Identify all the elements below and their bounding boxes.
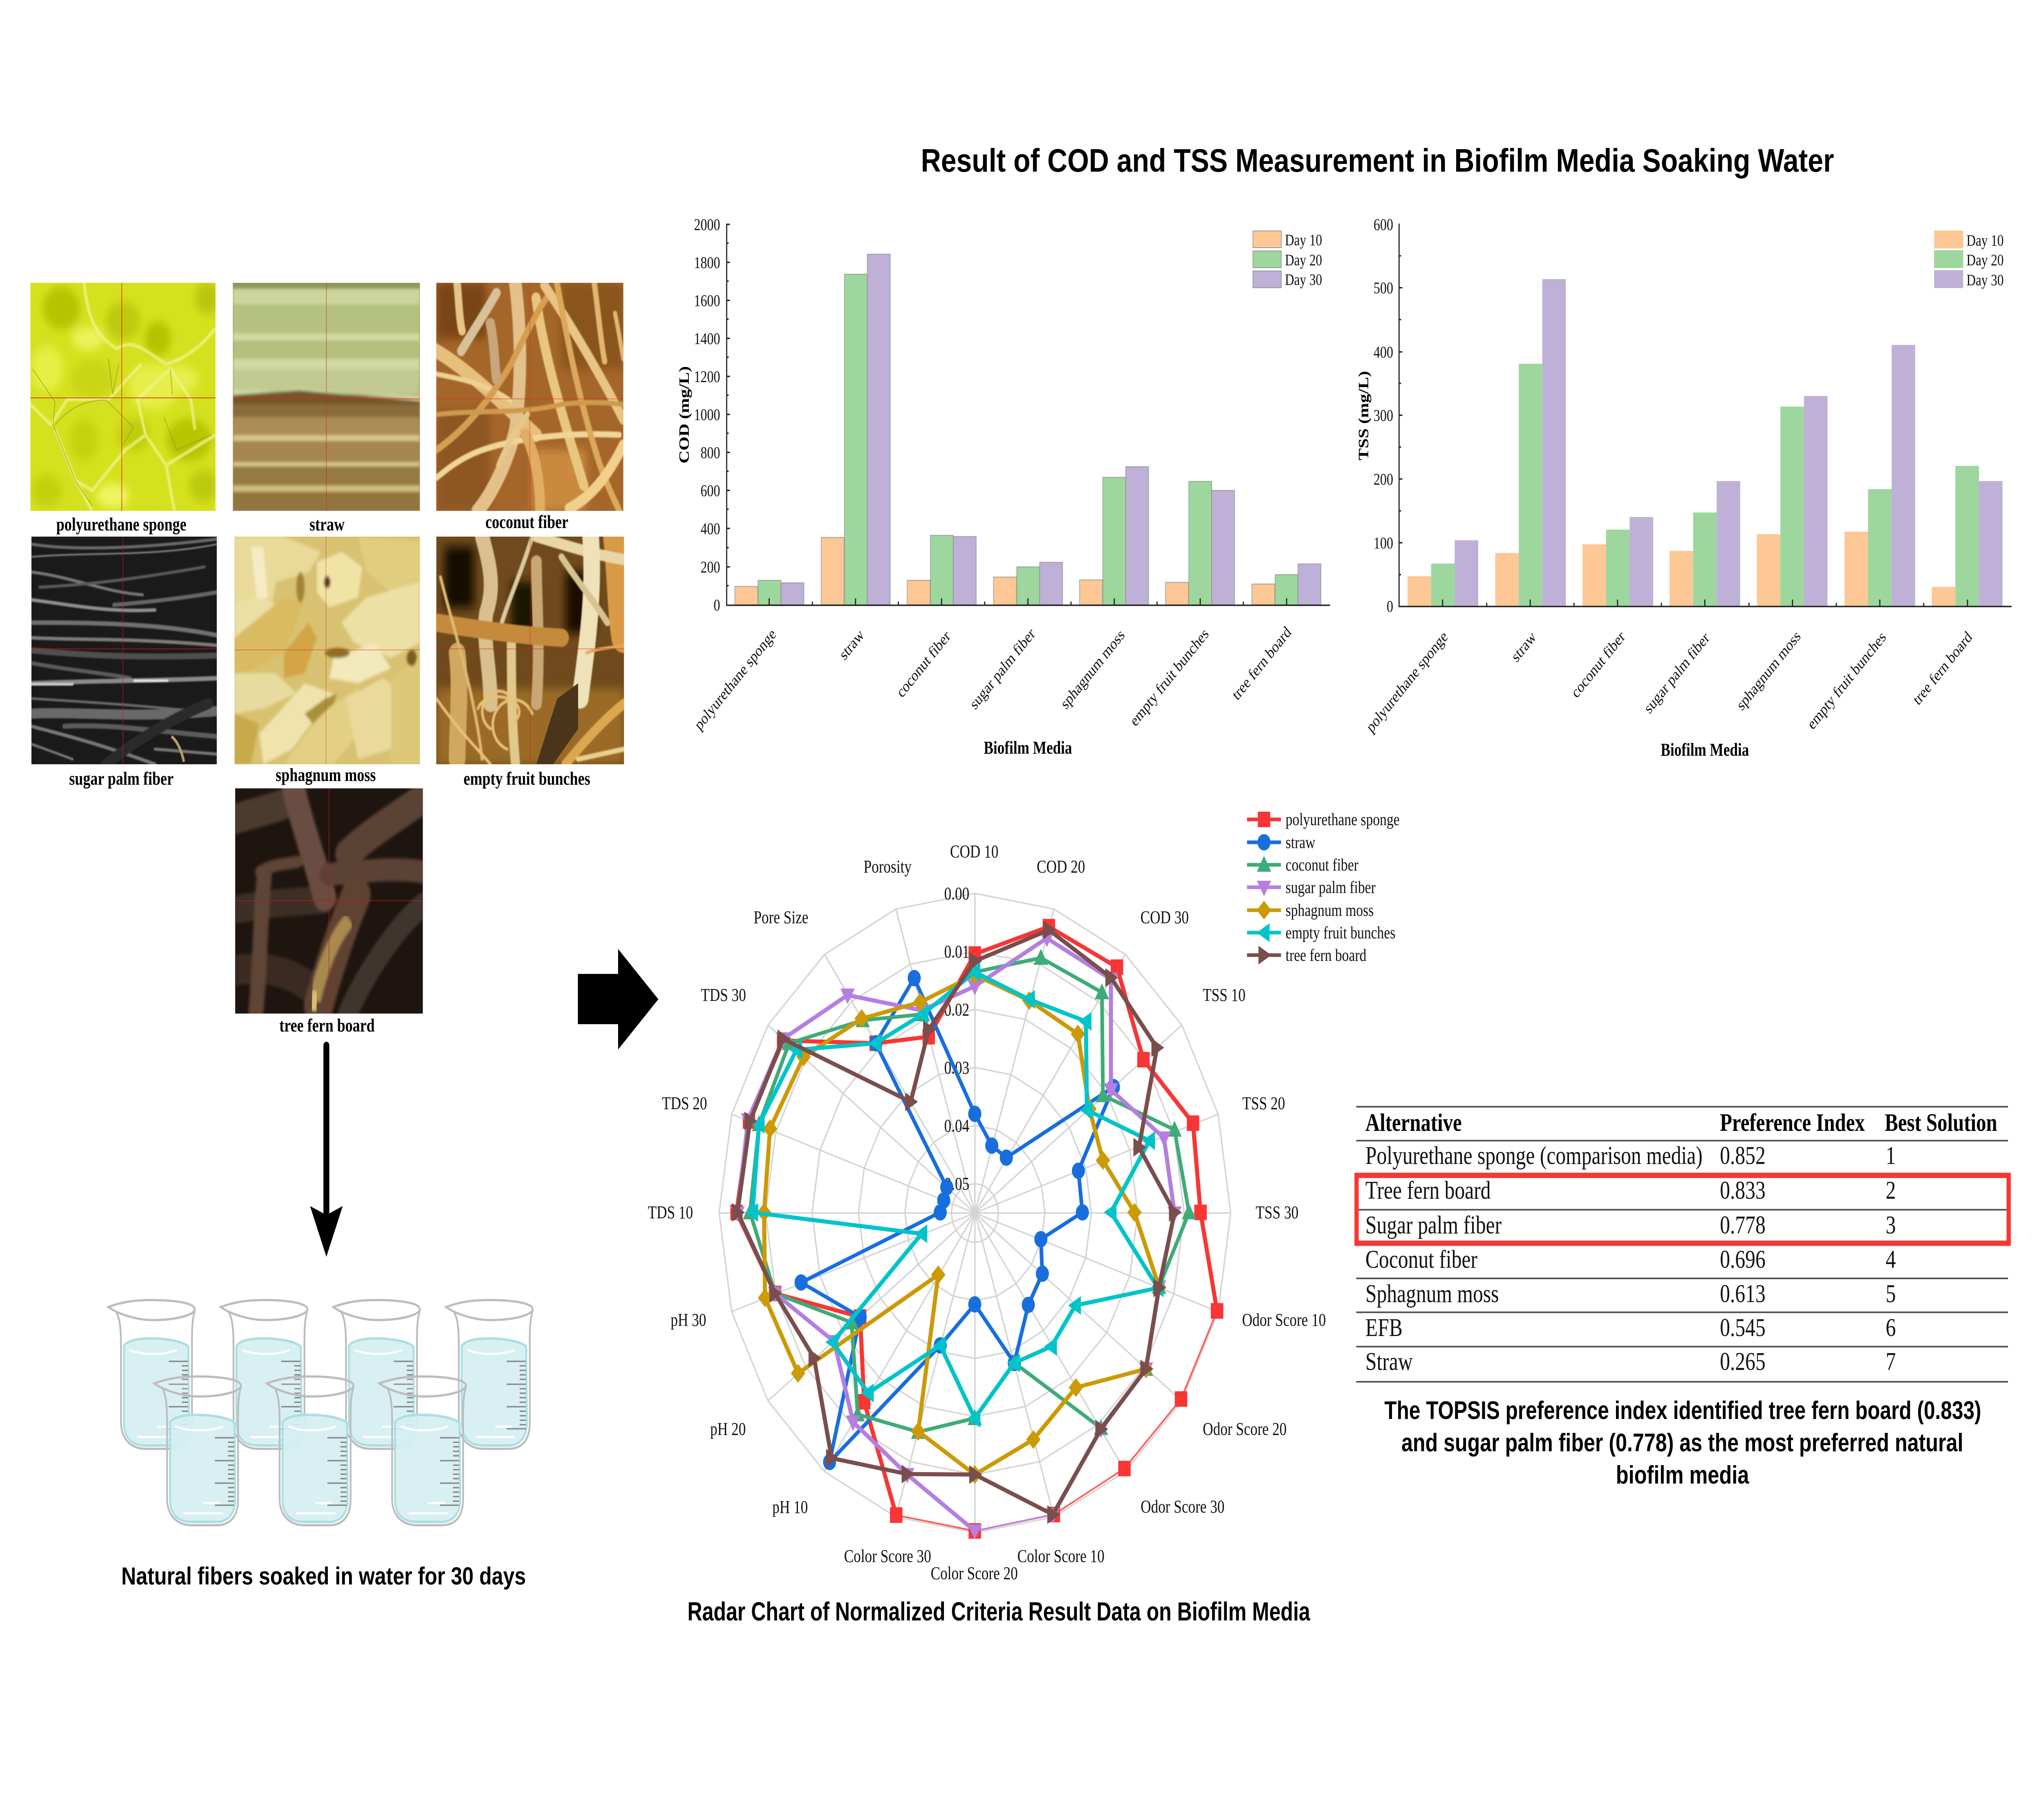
photo captions: straw [309, 514, 345, 535]
series: sphagnum moss [764, 975, 1159, 1475]
COD y tick labels: 1800 [694, 254, 720, 272]
table rows: Sphagnum moss [1365, 1280, 1499, 1308]
COD legend: Day 30 [1285, 271, 1322, 289]
radar legend: polyurethane sponge [1286, 810, 1400, 829]
radar chart [648, 810, 1400, 1583]
table rows: 0.613 [1720, 1280, 1766, 1308]
radar axis labels: TSS 20 [1242, 1093, 1285, 1113]
TSS category labels: sugar palm fiber [1641, 629, 1712, 717]
COD bars [735, 254, 1321, 605]
series: polyurethane sponge [737, 926, 1217, 1531]
table rows: 7 [1886, 1348, 1896, 1376]
arrow: down to beakers [310, 1045, 343, 1257]
table rows: EFB [1365, 1314, 1403, 1342]
photo: sugar palm fiber [31, 537, 217, 764]
table rows: Polyurethane sponge (comparison media) [1365, 1142, 1703, 1170]
TSS y tick labels: 600 [1374, 216, 1393, 234]
caption: TOPSIS result: The TOPSIS preference index identified tree fern board (0.833) [1384, 1396, 1981, 1424]
table rows: Coconut fiber [1365, 1246, 1477, 1273]
title: Result of COD and TSS Measurement in Biofilm Media Soaking Water [921, 142, 1834, 179]
radar legend: straw [1286, 833, 1316, 852]
COD y tick labels: 2000 [694, 216, 720, 234]
TSS category labels [1363, 627, 1975, 736]
bar chart: COD [676, 216, 1330, 758]
table rules [1356, 1107, 2008, 1382]
radar data series [737, 926, 1217, 1531]
COD y tick labels: 1000 [694, 406, 720, 424]
bar chart: TSS [1355, 216, 2012, 760]
TSS y tick labels: 0 [1387, 598, 1393, 615]
TSS axes [1399, 224, 2012, 606]
radar axis labels: pH 30 [671, 1309, 706, 1330]
COD category labels: tree fern board [1229, 623, 1294, 704]
photo: tree fern board [235, 788, 423, 1014]
caption: TOPSIS result: biofilm media [1616, 1461, 1749, 1489]
TSS category labels: sphagnum moss [1734, 627, 1803, 714]
COD y axis title: COD (mg/L) [676, 366, 692, 463]
table rows: 0.833 [1720, 1177, 1766, 1204]
COD category labels: straw [836, 626, 867, 664]
table rows: 0.696 [1720, 1246, 1766, 1273]
TSS y axis title: TSS (mg/L) [1355, 371, 1372, 460]
table rows: 4 [1886, 1246, 1896, 1273]
table rows: Tree fern board [1365, 1177, 1491, 1204]
photo: sphagnum moss [235, 537, 420, 764]
table: TOPSIS preference index [1356, 1107, 2009, 1382]
COD y tick labels: 200 [701, 558, 720, 576]
TSS category labels: tree fern board [1910, 628, 1975, 709]
caption: soaking: Natural fibers soaked in water for 30 days [121, 1562, 526, 1590]
table rows: 0.265 [1720, 1348, 1766, 1376]
COD y tick labels: 600 [701, 482, 720, 500]
radar legend [1247, 810, 1400, 965]
table rows: Straw [1365, 1348, 1413, 1376]
series: sugar palm fiber [737, 938, 1174, 1531]
caption: TOPSIS result: and sugar palm fiber (0.778) as the most preferred natural [1401, 1428, 1963, 1457]
series: straw [801, 978, 1114, 1462]
panel: fiber photographs [30, 282, 624, 1036]
table rows: 0.545 [1720, 1314, 1766, 1342]
photo captions: sphagnum moss [276, 765, 376, 785]
table rows [1365, 1142, 1896, 1376]
TSS x axis title: Biofilm Media [1661, 739, 1749, 760]
radar legend: empty fruit bunches [1286, 924, 1395, 942]
TSS category labels: polyurethane sponge [1363, 627, 1450, 736]
radial tick labels: 0.05 [944, 1173, 969, 1194]
icon: seven beakers of water [108, 1300, 533, 1525]
radar legend: tree fern board [1286, 946, 1366, 965]
COD legend [1253, 231, 1322, 289]
radial tick labels: 0.01 [944, 941, 969, 962]
table rows: Sugar palm fiber [1365, 1211, 1502, 1239]
COD y tick labels [694, 216, 720, 614]
TSS y tick labels: 100 [1374, 534, 1393, 552]
series: empty fruit bunches [753, 972, 1158, 1418]
radar axis labels: Pore Size [753, 907, 808, 927]
radar axis labels: Odor Score 30 [1141, 1496, 1224, 1517]
COD axes [727, 224, 1330, 605]
arrow: process to results [578, 949, 658, 1050]
radial tick labels [944, 883, 969, 1194]
COD y tick labels: 400 [701, 520, 720, 538]
radial tick labels: 0.00 [944, 883, 969, 904]
radar axis labels: COD 10 [950, 841, 998, 862]
TSS y tick labels [1374, 216, 1393, 615]
caption: TOPSIS result [1384, 1396, 1981, 1489]
radar axis labels: TSS 30 [1256, 1202, 1298, 1222]
radar axis labels: TSS 10 [1203, 985, 1246, 1005]
table rows: 1 [1886, 1142, 1896, 1170]
TSS legend: Day 10 [1966, 232, 2004, 249]
radar grid [719, 893, 1230, 1533]
radar legend: sugar palm fiber [1286, 878, 1376, 897]
radar axis labels: Porosity [864, 856, 912, 877]
radar axis labels: TDS 30 [701, 985, 746, 1005]
COD legend: Day 20 [1285, 251, 1322, 269]
photo captions [56, 512, 590, 1036]
TSS legend: Day 20 [1966, 251, 2004, 269]
radar axis labels: TDS 20 [662, 1093, 707, 1113]
radial tick labels: 0.03 [944, 1057, 969, 1078]
radar legend: sphagnum moss [1286, 901, 1374, 920]
series: coconut fiber [750, 958, 1189, 1432]
COD y tick labels: 1200 [694, 368, 720, 386]
TSS y tick labels: 500 [1374, 279, 1393, 297]
radar axis labels: COD 20 [1037, 856, 1085, 877]
photo: straw [233, 283, 420, 511]
photo: polyurethane sponge [30, 282, 220, 511]
table rows: 2 [1886, 1177, 1896, 1204]
photo: coconut fiber [432, 283, 623, 511]
radar axis labels: pH 10 [772, 1497, 808, 1517]
COD y tick labels: 1400 [694, 330, 720, 348]
COD category labels [692, 623, 1294, 734]
table rows: 3 [1886, 1211, 1896, 1239]
radar axis labels: Color Score 20 [931, 1563, 1018, 1583]
COD y tick labels: 1600 [694, 292, 720, 310]
COD y tick labels: 0 [714, 596, 720, 614]
caption: radar chart: Radar Chart of Normalized Criteria Result Data on Biofilm Media [688, 1598, 1310, 1626]
radar axis labels: pH 20 [710, 1419, 746, 1439]
radar axis labels: Color Score 30 [844, 1546, 931, 1566]
TSS category labels: straw [1508, 628, 1539, 666]
table header: Alternative [1365, 1109, 1462, 1136]
radar axis labels [648, 841, 1326, 1583]
COD y tick labels: 800 [701, 444, 720, 462]
COD category labels: coconut fiber [894, 627, 953, 701]
table header: Best Solution [1885, 1109, 1997, 1136]
COD legend: Day 10 [1285, 231, 1322, 249]
series: tree fern board [737, 930, 1174, 1515]
photo captions: tree fern board [279, 1015, 375, 1036]
radar axis labels: TDS 10 [648, 1202, 693, 1222]
table rows: 5 [1886, 1280, 1896, 1308]
photo captions: empty fruit bunches [464, 768, 590, 789]
TSS category labels: coconut fiber [1569, 627, 1628, 701]
table rows: 0.852 [1720, 1142, 1766, 1170]
TSS y tick labels: 300 [1374, 407, 1393, 425]
COD category labels: sphagnum moss [1058, 626, 1127, 713]
photo captions: polyurethane sponge [56, 514, 186, 535]
TSS legend [1934, 231, 2004, 289]
radial tick labels: 0.02 [944, 999, 969, 1020]
table rows: 0.778 [1720, 1211, 1766, 1239]
radar axis labels: COD 30 [1141, 907, 1189, 927]
radar axis labels: Odor Score 10 [1242, 1309, 1326, 1330]
photo: empty fruit bunches [436, 537, 624, 764]
TSS y tick labels: 200 [1374, 470, 1393, 488]
table header [1365, 1109, 1997, 1136]
COD category labels: empty fruit bunches [1127, 624, 1211, 730]
photo captions: coconut fiber [485, 512, 568, 532]
table rows: 6 [1886, 1314, 1896, 1342]
TSS legend: Day 30 [1966, 271, 2004, 289]
table header: Preference Index [1720, 1109, 1865, 1136]
radar axis labels: Color Score 10 [1018, 1546, 1105, 1566]
radar legend: coconut fiber [1286, 856, 1358, 875]
COD category labels: sugar palm fiber [967, 624, 1038, 713]
TSS bars [1407, 279, 2002, 606]
photo captions: sugar palm fiber [69, 768, 173, 789]
radial tick labels: 0.04 [944, 1115, 969, 1136]
COD x axis title: Biofilm Media [984, 737, 1072, 758]
TSS category labels: empty fruit bunches [1804, 628, 1889, 733]
COD category labels: polyurethane sponge [692, 625, 779, 734]
highlight box [1356, 1175, 2009, 1243]
TSS y tick labels: 400 [1374, 343, 1393, 361]
radar axis labels: Odor Score 20 [1203, 1419, 1286, 1439]
